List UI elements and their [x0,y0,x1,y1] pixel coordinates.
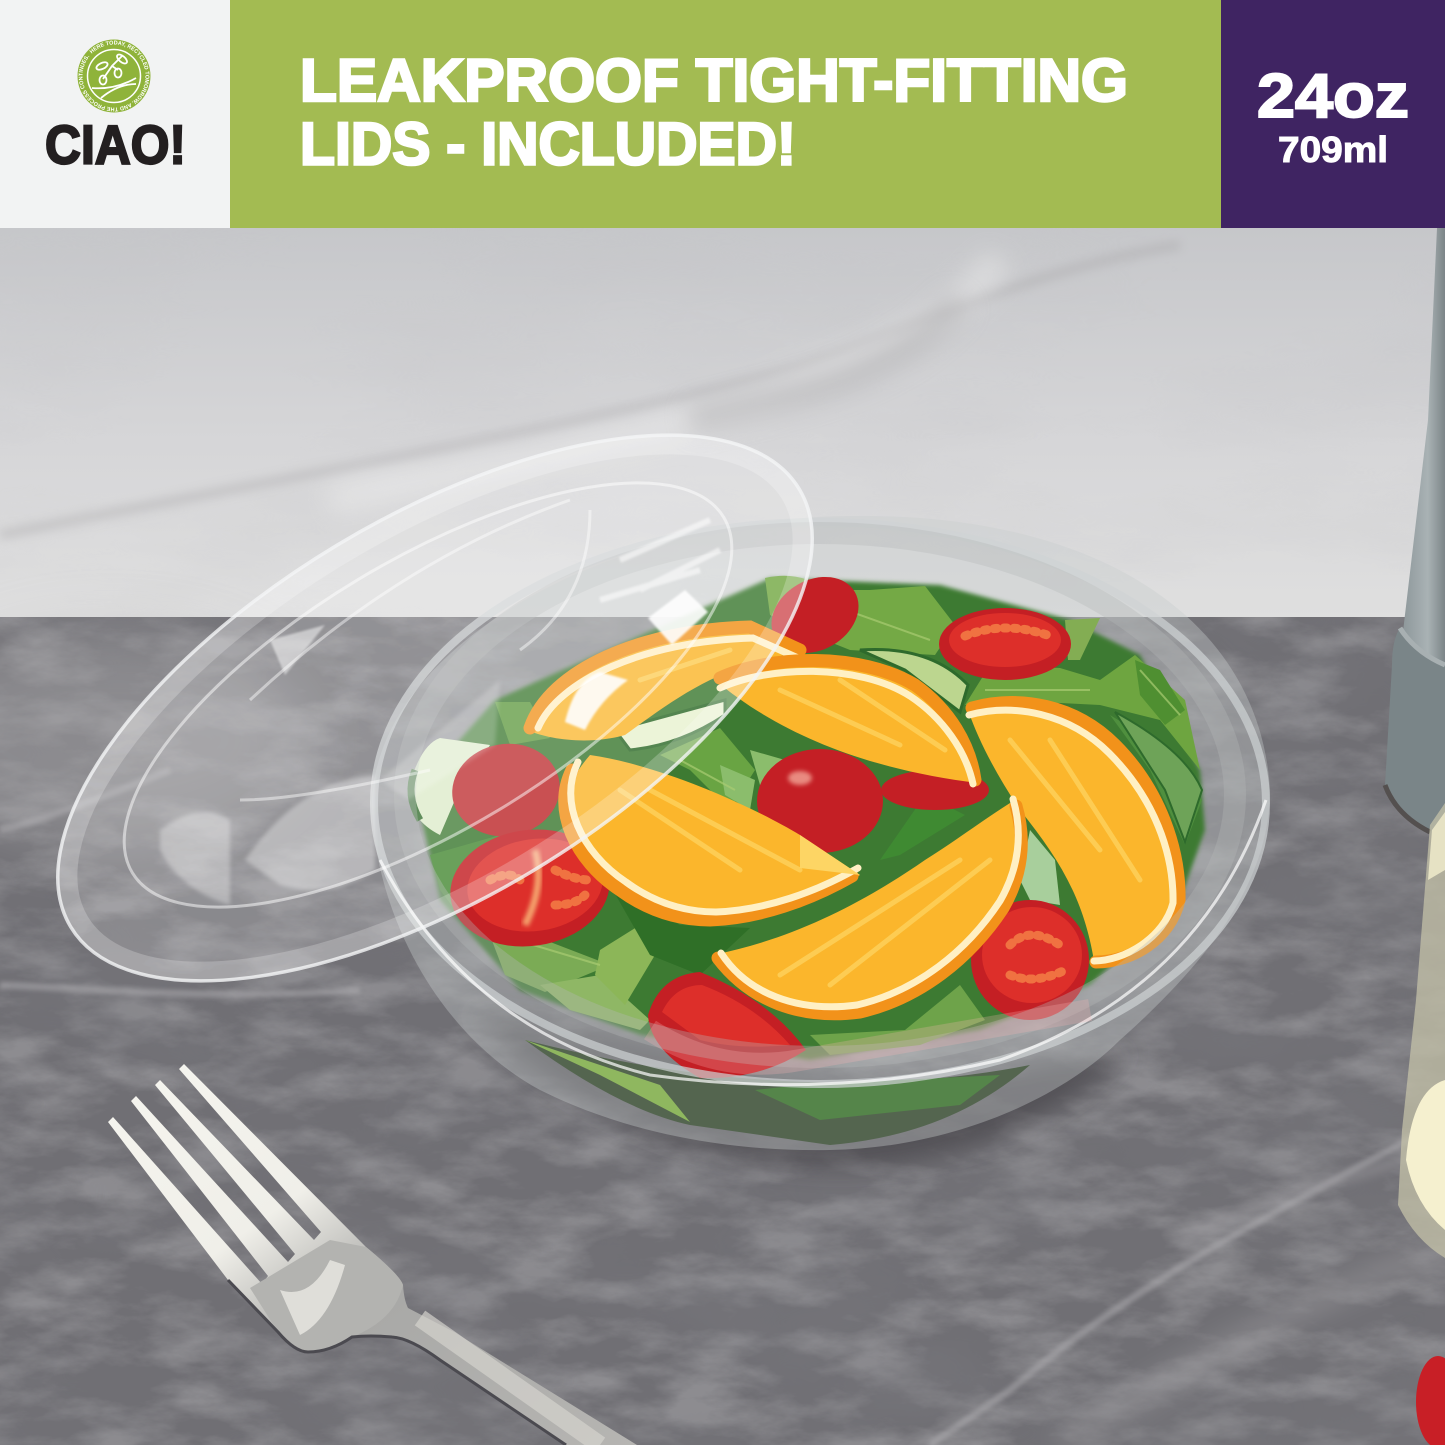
orange slices [527,625,1183,1016]
tomatoes [443,562,1089,1078]
photo background: marble wall [0,228,1445,620]
tomato bottom right [1416,1356,1445,1445]
orange: center slice [564,755,860,925]
photo background: stone table [0,617,1445,1445]
header panel: headline: LEAKPROOF TIGHT-FITTING [300,47,1128,114]
logo wordmark: CIAO! [45,114,186,176]
orange flesh streaks [620,650,1140,985]
header panel: headline: LIDS - INCLUDED! [300,110,796,178]
orange: right slice [968,703,1183,967]
bowl body [372,516,1270,1150]
header panel: size: 709ml [1278,129,1388,170]
header panel: logo [0,0,230,228]
metal canister at right [1385,228,1445,836]
orange: lower slice [712,799,1024,1016]
logo badge: HERE TODAY, RECYCLED TOMORROW. AND THE PROCESS CONTINUES. [78,40,150,112]
salad leaves and cucumber [408,576,1205,1060]
orange: top slice [715,660,978,784]
fork [108,1064,637,1445]
clear lid [0,326,897,1090]
drinking glass at right [1398,803,1445,1258]
orange: back slice [527,625,803,740]
header panel: size: 24oz [1257,62,1409,131]
bowl rim [374,522,1266,1085]
header panel: headline [230,0,1221,228]
header panel: size [1221,0,1445,228]
